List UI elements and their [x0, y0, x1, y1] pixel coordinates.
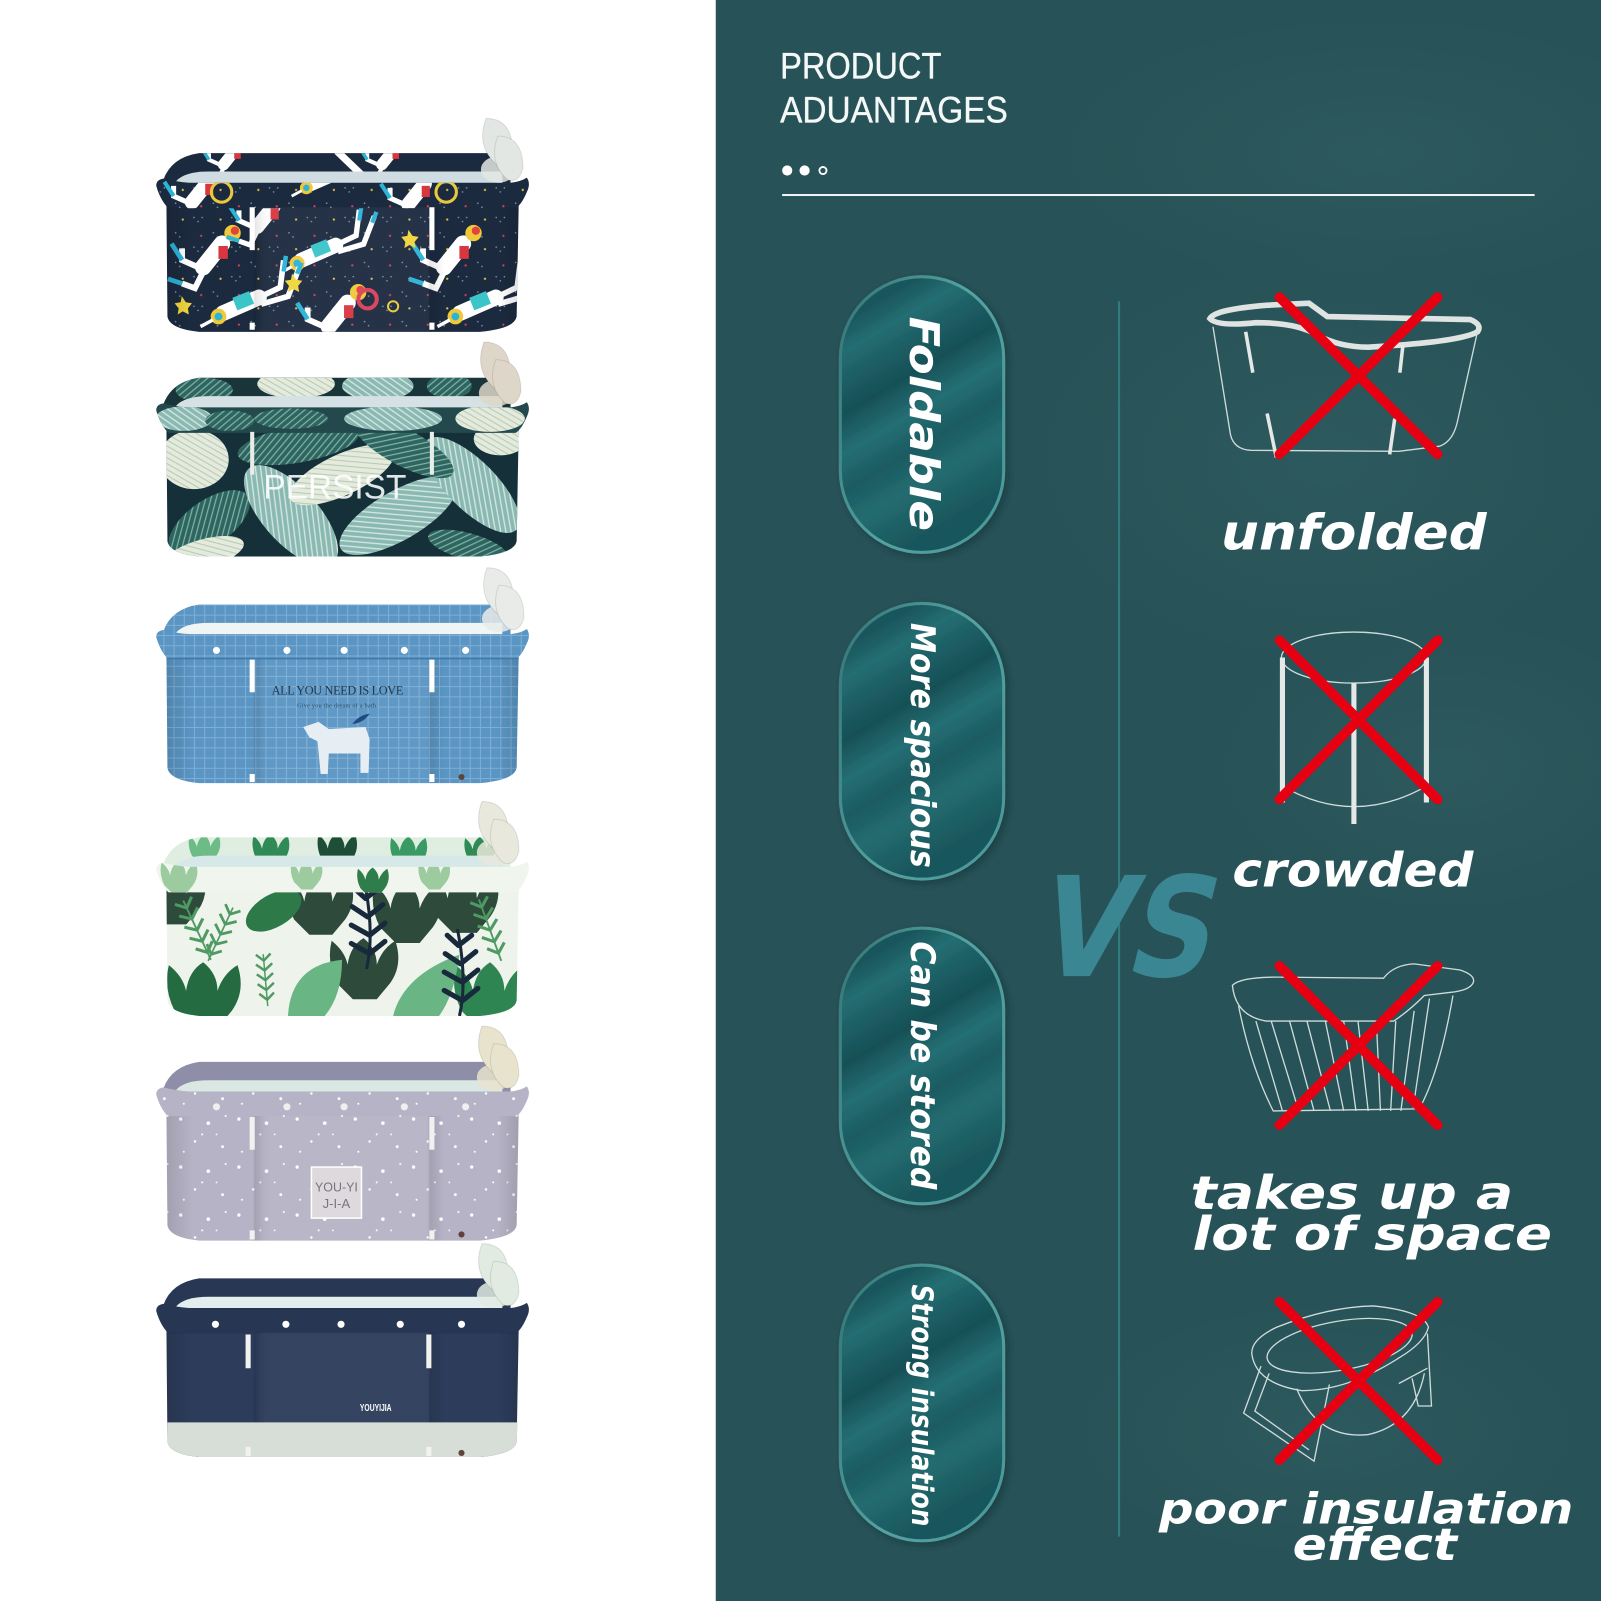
- label: poor insulation effect: poor insulation: [1158, 1484, 1573, 1534]
- tub lettering: PERSIST: [263, 468, 406, 506]
- label: poor insulation effect: effect: [1293, 1518, 1459, 1571]
- icon: bulky tub, crossed out: [1232, 964, 1474, 1125]
- pill: Can be stored: Can be stored: [903, 941, 942, 1190]
- label: takes up a lot of space: [1191, 1166, 1552, 1261]
- title: ADUANTAGES: [780, 90, 1008, 131]
- pill: More spacious: More spacious: [903, 623, 942, 868]
- label: unfolded: unfolded: [1221, 504, 1488, 561]
- tub label: YOU-YI: [315, 1180, 358, 1195]
- white left background: [0, 0, 716, 1601]
- VS mark: VS: [1023, 848, 1239, 1010]
- icon: horse: [303, 722, 370, 774]
- tub tagline: Give you the dream of a bath.: [297, 703, 378, 710]
- tub label: J-I-A: [323, 1196, 350, 1211]
- label: takes up a lot of space: takes up a: [1191, 1166, 1513, 1220]
- panel: product tub colours: [145, 118, 538, 1457]
- tub: astronaut print: [156, 118, 538, 347]
- tub: green plant print: [145, 802, 529, 1028]
- pill: Foldable: Foldable: [900, 317, 948, 531]
- center divider: [1118, 301, 1120, 1537]
- pill: Can be stored: [840, 928, 1004, 1204]
- tub label: [311, 1167, 361, 1218]
- pill: Strong insulation: [840, 1265, 1004, 1541]
- title dots: [782, 165, 827, 176]
- tub: grey speckled: [156, 1026, 529, 1241]
- title: PRODUCT: [780, 46, 941, 87]
- label: crowded: crowded: [1232, 843, 1474, 898]
- label: takes up a lot of space: lot of space: [1193, 1207, 1552, 1261]
- icon: unfolded tub, crossed out: [1210, 297, 1479, 457]
- pill: Strong insulation: Strong insulation: [905, 1284, 939, 1526]
- label: poor insulation effect: [1158, 1484, 1573, 1571]
- pill: Foldable: [840, 277, 1004, 552]
- title rule: [782, 194, 1535, 196]
- tub: blue grid: [156, 568, 529, 783]
- tub slogan: ALL YOU NEED IS LOVE: [272, 683, 403, 697]
- icon: crowded tub, crossed out: [1279, 632, 1438, 824]
- icon: insulation tub, crossed out: [1244, 1302, 1438, 1461]
- tub: navy with pale base: [156, 1244, 529, 1457]
- tub brand: YOUYIJIA: [360, 1403, 392, 1414]
- pill: More spacious: [840, 603, 1004, 879]
- panel: product advantages background: [716, 0, 1601, 1601]
- title: [780, 46, 1008, 131]
- tub: tropical leaf print: [156, 342, 529, 556]
